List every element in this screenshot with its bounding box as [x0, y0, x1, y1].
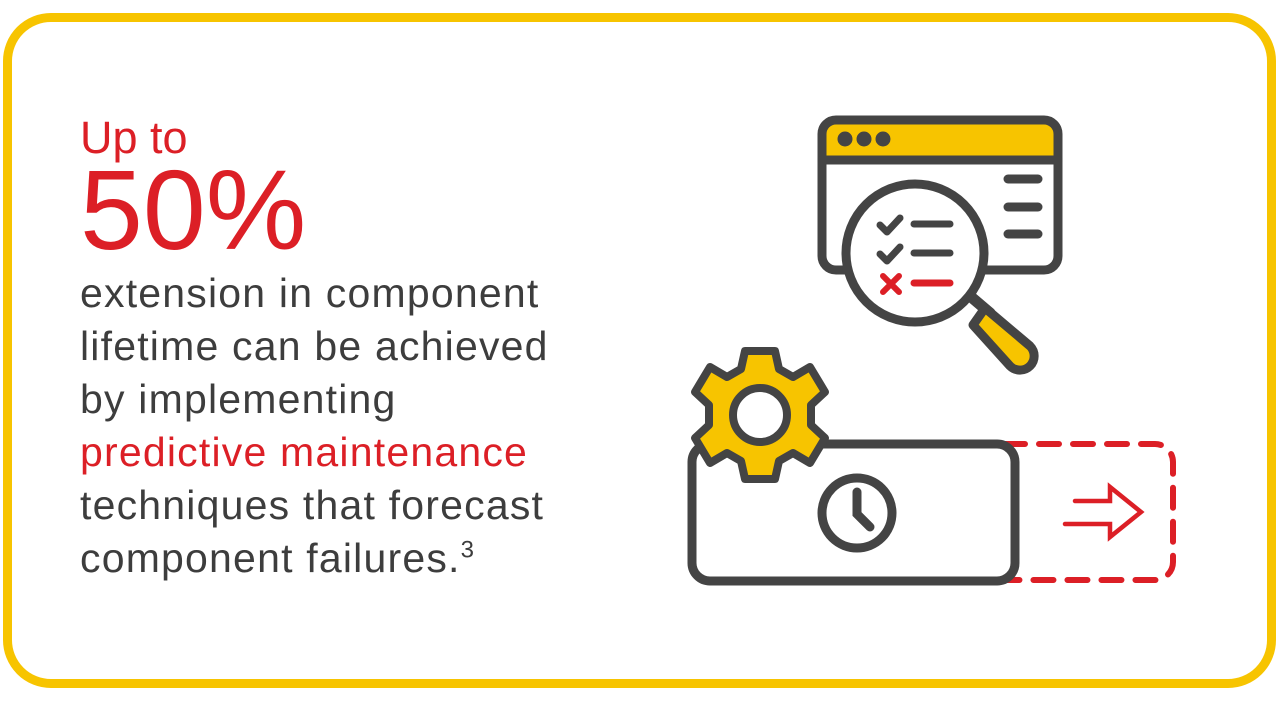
text: 50%: 50%	[80, 147, 306, 273]
icon: clock box	[692, 444, 1015, 581]
text: body: extension in component	[80, 270, 539, 316]
text: body: by implementing	[80, 376, 397, 422]
text: body: predictive maintenance	[80, 429, 528, 475]
text: body: techniques that forecast	[80, 482, 544, 528]
icon: dashed extension box	[1005, 444, 1173, 580]
icon: gear	[695, 351, 825, 479]
text: body	[80, 270, 549, 581]
text: up to: Up to	[80, 112, 188, 163]
icon: arrow	[1065, 487, 1141, 537]
text: body: lifetime can be achieved	[80, 323, 549, 369]
icon: browser window	[822, 120, 1058, 270]
text: body: component failures.3	[80, 535, 475, 581]
icon: magnifier	[846, 184, 1034, 370]
